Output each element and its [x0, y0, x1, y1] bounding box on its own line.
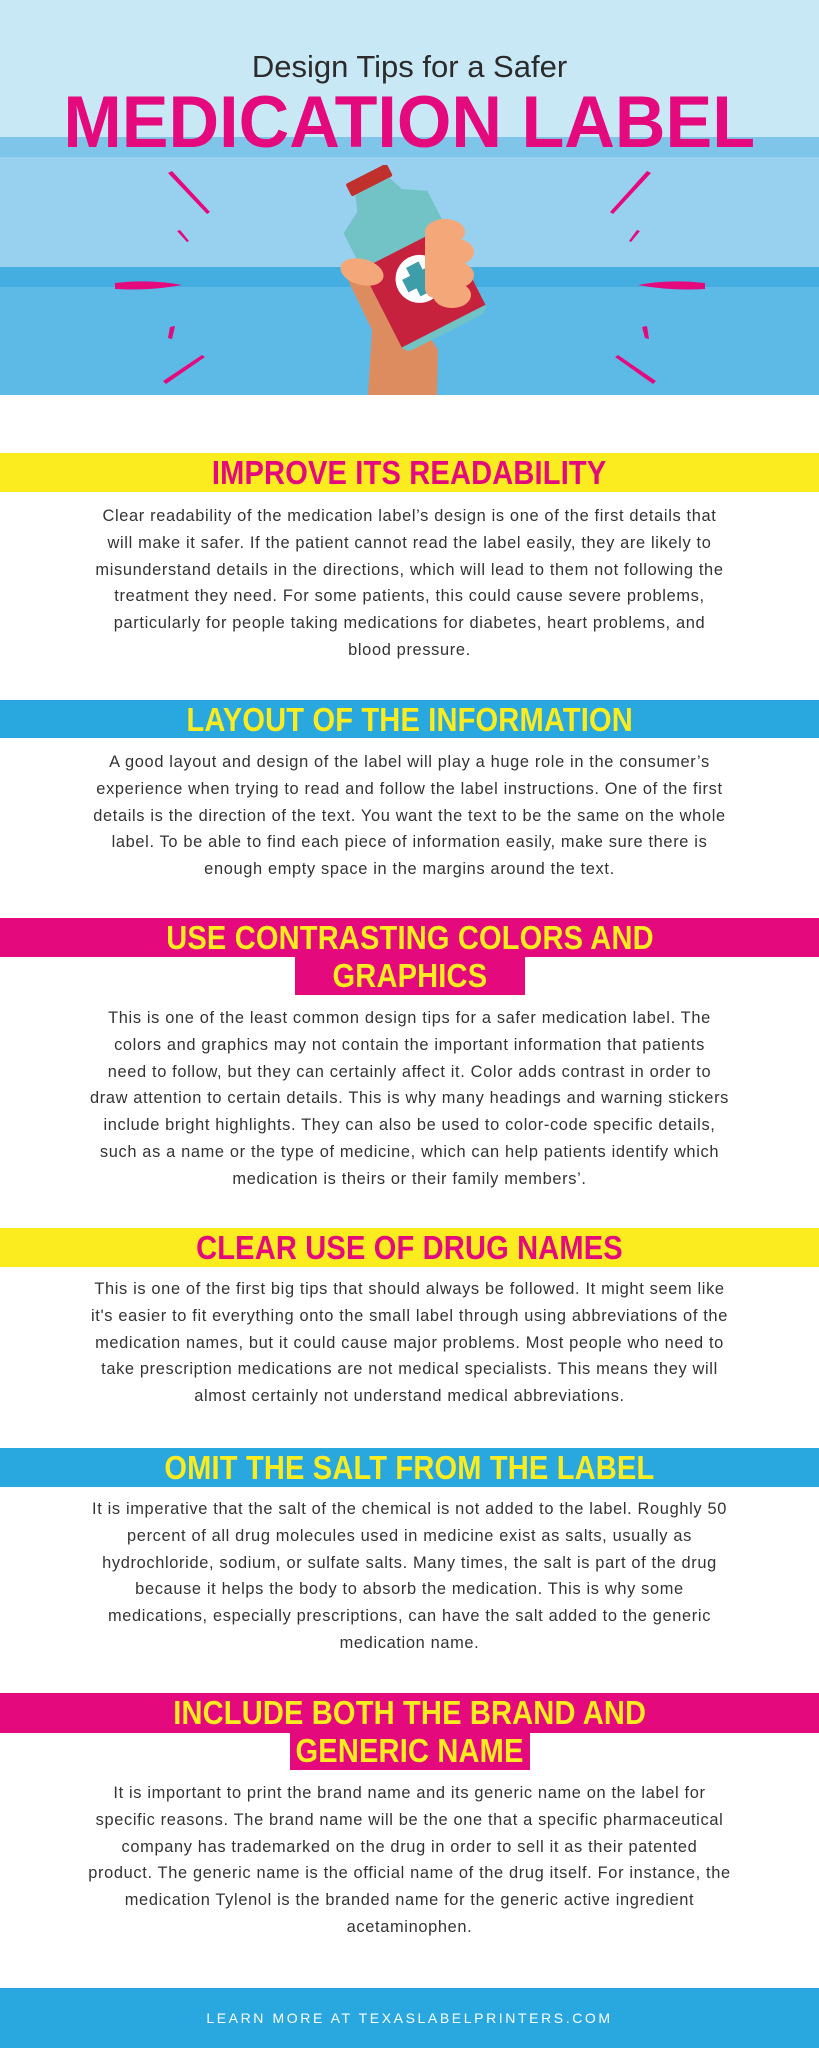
section 3 text: such as a name or the type of medicine, which can help patients identify which	[100, 1143, 719, 1161]
section 4 text: This is one of the first big tips that should always be followed. It might seem like	[94, 1280, 725, 1298]
section 6 heading	[0, 1693, 819, 1770]
section 6 text	[88, 1784, 731, 1936]
section 2 heading	[0, 700, 819, 738]
section 3 text	[90, 1009, 729, 1188]
section 1 text: will make it safer. If the patient cannot read the label easily, they are likely to	[108, 534, 711, 552]
icon: rays	[115, 171, 705, 384]
section 5 text: medications, especially prescriptions, can have the salt added to the generic	[108, 1607, 711, 1625]
section 5 heading	[0, 1448, 819, 1487]
section 6 text: medication Tylenol is the branded name for the generic active ingredient	[125, 1891, 694, 1909]
section 4 text: it's easier to fit everything onto the small label through using abbreviations of the	[91, 1307, 728, 1325]
section 2 text	[93, 753, 726, 878]
section 3 text: draw attention to certain details. This is why many headings and warning stickers	[90, 1089, 729, 1107]
icon: hand holding medication bottle	[340, 165, 486, 395]
section 6 text: acetaminophen.	[347, 1918, 472, 1936]
section 3 text: need to follow, but they can certainly affect it. Color adds contrast in order to	[108, 1063, 711, 1081]
section 5 text: medication name.	[340, 1634, 479, 1652]
section 6 heading: GENERIC NAME	[295, 1732, 524, 1769]
section 1 heading: IMPROVE ITS READABILITY	[212, 454, 607, 491]
title: subtitle: Design Tips for a Safer	[252, 49, 567, 84]
section 4 heading: CLEAR USE OF DRUG NAMES	[196, 1229, 623, 1266]
section 5 heading: OMIT THE SALT FROM THE LABEL	[165, 1449, 654, 1486]
section 1 text: Clear readability of the medication label’s design is one of the first details that	[102, 507, 716, 525]
section 5 text: percent of all drug molecules used in medicine exist as salts, usually as	[127, 1527, 692, 1545]
section 3 text: medication is theirs or their family members’.	[232, 1170, 587, 1188]
section 4 heading	[0, 1228, 819, 1267]
section 3 text: This is one of the least common design tips for a safer medication label. The	[108, 1009, 711, 1027]
section 1 text: particularly for people taking medications for diabetes, heart problems, and	[114, 614, 705, 632]
section 3 heading: USE CONTRASTING COLORS AND	[166, 919, 653, 956]
section 2 text: details is the direction of the text. You want the text to be the same on the whole	[93, 807, 726, 825]
section 3 text: colors and graphics may not contain the important information that patients	[114, 1036, 705, 1054]
section 6 text: specific reasons. The brand name will be the one that a specific pharmaceutical	[96, 1811, 723, 1829]
section 2 text: enough empty space in the margins around the text.	[204, 860, 615, 878]
section 5 text: because it helps the body to absorb the medication. This is why some	[135, 1580, 684, 1598]
section 1 heading	[0, 453, 819, 492]
section 1 text	[95, 507, 724, 659]
section 4 text: almost certainly not understand medical abbreviations.	[194, 1387, 625, 1405]
footer	[0, 1988, 819, 2048]
header illustration background	[0, 0, 819, 395]
section 5 text	[92, 1500, 727, 1652]
section 6 text: product. The generic name is the official name of the drug itself. For instance, the	[88, 1864, 731, 1882]
section 4 text: take prescription medications are not medical specialists. This means they will	[101, 1360, 718, 1378]
section 6 heading: INCLUDE BOTH THE BRAND AND	[173, 1694, 646, 1731]
section 3 heading	[0, 918, 819, 995]
footer: LEARN MORE AT TEXASLABELPRINTERS.COM	[206, 2010, 613, 2026]
section 5 text: It is imperative that the salt of the chemical is not added to the label. Roughly 50	[92, 1500, 727, 1518]
section 4 text: medication names, but it could cause major problems. Most people who need to	[95, 1334, 724, 1352]
section 3 heading: GRAPHICS	[332, 957, 487, 994]
section 1 text: treatment they need. For some patients, this could cause severe problems,	[114, 587, 705, 605]
section 5 text: hydrochloride, sodium, or sulfate salts. Many times, the salt is part of the drug	[102, 1554, 717, 1572]
section 6 text: It is important to print the brand name and its generic name on the label for	[113, 1784, 706, 1802]
section 1 text: misunderstand details in the directions, which will lead to them not following the	[95, 561, 724, 579]
section 2 text: label. To be able to find each piece of information easily, make sure there is	[112, 833, 707, 851]
section 6 text: company has trademarked on the drug in order to sell it as their patented	[122, 1838, 697, 1856]
section 3 text: include bright highlights. They can also be used to color-code specific details,	[103, 1116, 716, 1134]
section 2 heading: LAYOUT OF THE INFORMATION	[186, 701, 633, 738]
section 4 text	[91, 1280, 728, 1405]
section 2 text: experience when trying to read and follow the label instructions. One of the first	[96, 780, 723, 798]
section 2 text: A good layout and design of the label will play a huge role in the consumer’s	[109, 753, 710, 771]
section 1 text: blood pressure.	[348, 641, 471, 659]
title: main: MEDICATION LABEL	[64, 82, 755, 163]
